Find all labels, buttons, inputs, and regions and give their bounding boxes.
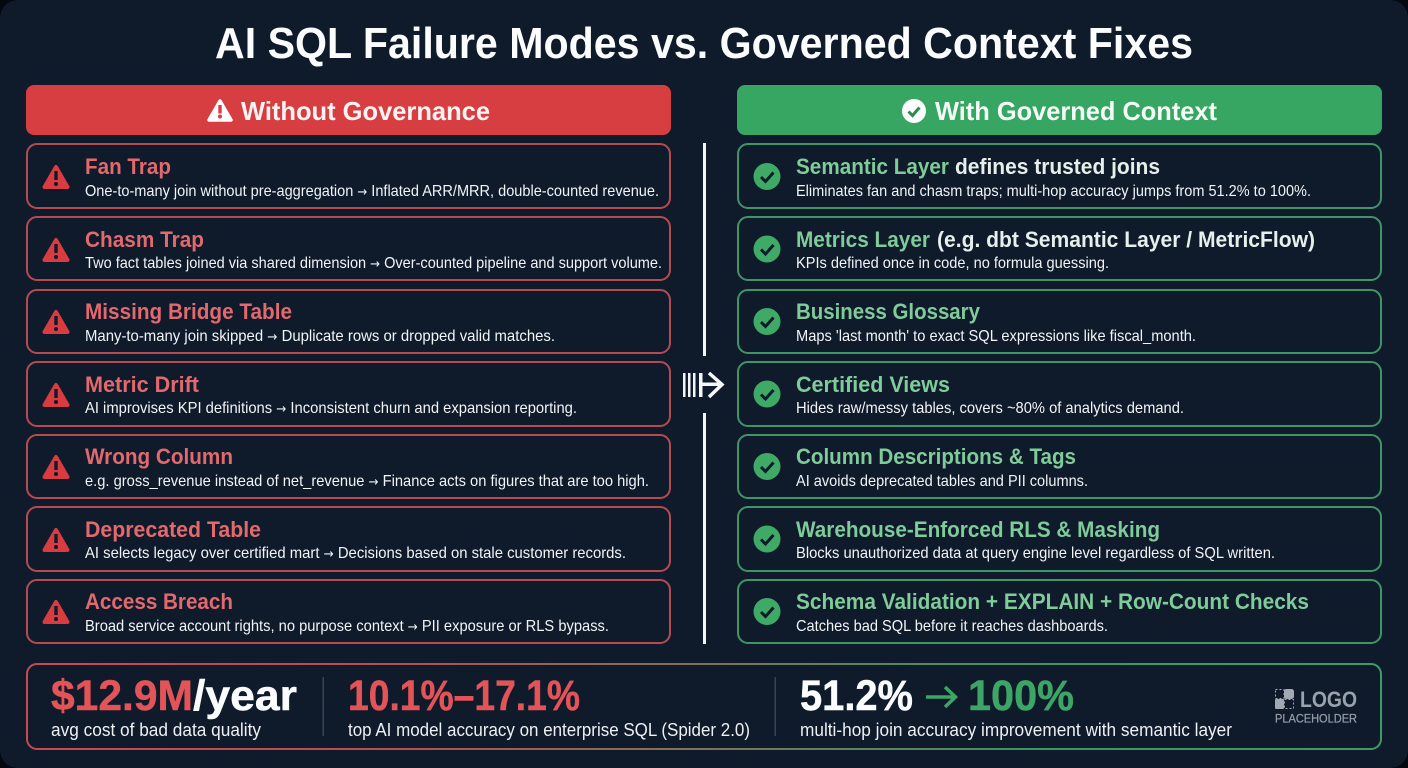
failure: metric drift <box>27 362 670 426</box>
failure: chasm trap <box>27 217 670 280</box>
icon: center arrow <box>683 373 722 397</box>
fix: semantic layer: Eliminates fan and chasm traps; multi-hop accuracy jumps from 51.2% to 100%. <box>796 183 1311 200</box>
icon: check <box>754 453 780 480</box>
fix: metrics layer <box>738 217 1381 280</box>
icon: warning <box>44 240 68 260</box>
stat: join accuracy <box>800 672 1232 740</box>
heading text: Without Governance <box>241 96 490 126</box>
fix: certified views <box>738 362 1381 426</box>
fix: warehouse-enforced RLS: Warehouse-Enforced RLS & Masking <box>796 517 1160 542</box>
icon: warning <box>44 167 68 187</box>
stat: cost of bad data: avg cost of bad data quality <box>51 719 262 740</box>
icon: check <box>754 526 780 552</box>
failure: fan trap: One-to-many join without pre-aggregation → Inflated ARR/MRR, double-counted revenue. <box>85 183 659 200</box>
fix: warehouse-enforced RLS <box>738 507 1381 571</box>
failure: wrong column: Wrong Column <box>85 444 233 469</box>
title: AI SQL Failure Modes vs. Governed Context Fixes <box>215 19 1193 68</box>
fix: column descriptions <box>738 435 1381 498</box>
fix: column descriptions: Column Descriptions & Tags <box>796 444 1076 469</box>
failure: deprecated table <box>27 507 670 571</box>
failure: missing bridge table: Many-to-many join skipped → Duplicate rows or dropped valid matches. <box>85 328 555 345</box>
fix: schema validation: Schema Validation + EXPLAIN + Row-Count Checks <box>796 589 1309 614</box>
header: with governed context <box>737 85 1382 135</box>
failure: fan trap: Fan Trap <box>85 154 171 179</box>
fix: certified views: Hides raw/messy tables, covers ~80% of analytics demand. <box>796 400 1184 417</box>
stat: model accuracy: top AI model accuracy on enterprise SQL (Spider 2.0) <box>348 719 750 740</box>
icon: check <box>754 236 780 262</box>
stat: join accuracy: multi-hop join accuracy improvement with semantic layer <box>800 719 1232 740</box>
failure: chasm trap: Chasm Trap <box>85 227 204 252</box>
failure: missing bridge table <box>27 290 670 353</box>
icon: warning <box>44 312 68 332</box>
fix: business glossary: Maps 'last month' to exact SQL expressions like fiscal_month. <box>796 328 1196 345</box>
fix: certified views: Certified Views <box>796 372 950 397</box>
stat: cost of bad data <box>51 672 297 740</box>
logo placeholder: PLACEHOLDER <box>1275 714 1357 726</box>
icon: warning <box>44 385 68 405</box>
fix: schema validation <box>738 580 1381 643</box>
icon: check <box>754 380 780 408</box>
failure: access breach: Access Breach <box>85 589 233 614</box>
stat: model accuracy <box>348 672 750 740</box>
icon: white check circle <box>902 99 926 123</box>
fix: semantic layer: Semantic Layer <box>796 154 949 179</box>
stat: model accuracy: 10.1%–17.1% <box>348 672 580 720</box>
header: without governance <box>26 85 671 135</box>
icon: warning <box>44 530 68 550</box>
failure: deprecated table: Deprecated Table <box>85 517 261 542</box>
fix: metrics layer: Metrics Layer <box>796 227 930 252</box>
icon: check <box>754 163 780 190</box>
failure: missing bridge table: Missing Bridge Table <box>85 299 292 324</box>
fix: business glossary <box>738 290 1381 353</box>
stat: cost of bad data: /year <box>193 672 297 720</box>
failure: metric drift: AI improvises KPI definitions → Inconsistent churn and expansion reporting. <box>85 400 577 417</box>
stats bar <box>27 664 1381 749</box>
fix: metrics layer: (e.g. dbt Semantic Layer / MetricFlow) <box>937 227 1315 252</box>
icon: warning <box>44 602 68 622</box>
stat: join accuracy: 100% <box>968 672 1074 720</box>
fix: warehouse-enforced RLS: Blocks unauthorized data at query engine level regardless of SQL written. <box>796 545 1275 562</box>
fix: column descriptions: AI avoids deprecated tables and PII columns. <box>796 473 1088 490</box>
icon: white warning triangle <box>209 101 231 120</box>
fix: metrics layer: KPIs defined once in code, no formula guessing. <box>796 255 1109 272</box>
arrow: improvement <box>926 687 956 707</box>
failure: wrong column <box>27 435 670 498</box>
failure: fan trap <box>27 144 670 208</box>
failure: wrong column: e.g. gross_revenue instead of net_revenue → Finance acts on figures that are too high. <box>85 473 649 490</box>
center divider <box>703 143 706 644</box>
logo placeholder: LOGO <box>1300 687 1357 712</box>
stat: join accuracy: 51.2% <box>800 672 913 720</box>
failure: access breach <box>27 580 670 643</box>
logo placeholder <box>1275 687 1357 726</box>
icon: warning <box>44 457 68 477</box>
failure: chasm trap: Two fact tables joined via shared dimension → Over-counted pipeline and support volume. <box>85 255 662 272</box>
fix: schema validation: Catches bad SQL before it reaches dashboards. <box>796 618 1108 635</box>
fix: business glossary: Business Glossary <box>796 299 980 324</box>
stat: cost of bad data: $12.9M <box>51 672 193 720</box>
icon: check <box>754 598 780 625</box>
failure: metric drift: Metric Drift <box>85 372 199 397</box>
fix: semantic layer: defines trusted joins <box>955 154 1160 179</box>
icon: check <box>754 308 780 335</box>
fix: semantic layer <box>738 144 1381 208</box>
failure: deprecated table: AI selects legacy over certified mart → Decisions based on stale customer records. <box>85 545 626 562</box>
heading text: With Governed Context <box>935 96 1217 126</box>
failure: access breach: Broad service account rights, no purpose context → PII exposure or RLS bypass. <box>85 618 609 635</box>
